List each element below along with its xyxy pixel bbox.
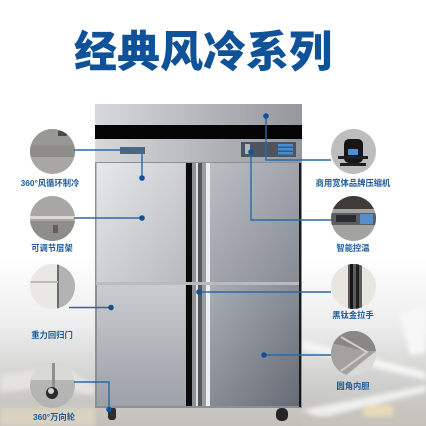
circle: rounded inner liner <box>331 331 376 376</box>
dot: handle <box>196 289 202 295</box>
dot: compressor <box>263 113 269 119</box>
right upper door <box>210 163 299 282</box>
leader: liner <box>264 354 331 356</box>
label: adjustable shelf: 可调节层架 <box>31 243 73 253</box>
left lower door <box>97 285 186 406</box>
body frame <box>95 162 302 408</box>
circle: black titanium handle <box>331 264 376 309</box>
label: air circulation: 360°风循环制冷 <box>21 178 79 188</box>
circle: universal caster <box>30 363 75 408</box>
label: rounded inner liner: 圆角内胆 <box>336 381 370 391</box>
leader: caster <box>74 382 109 409</box>
label: universal caster: 360°万向轮 <box>33 412 75 422</box>
dot: temperature control <box>248 149 254 155</box>
left display <box>120 147 145 154</box>
right dark edge <box>299 163 301 407</box>
label: black titanium handle: 黑钛金拉手 <box>332 310 374 320</box>
label: smart temperature control: 智能控温 <box>336 243 370 253</box>
circle: adjustable shelf <box>30 196 75 241</box>
leader: temperature control <box>251 152 331 220</box>
dot: gravity door <box>108 305 114 310</box>
right lower door <box>210 285 299 406</box>
dot: caster <box>106 407 112 412</box>
label: compressor: 商用宽体品牌压缩机 <box>316 178 390 188</box>
leader: air circulation <box>74 150 142 178</box>
left upper door <box>96 163 186 282</box>
circle: gravity return door <box>30 264 75 309</box>
leader: handle <box>199 291 331 293</box>
title: 经典风冷系列 <box>74 18 332 80</box>
dot: air circulation <box>139 175 145 181</box>
leader: gravity door <box>69 306 111 308</box>
door divider <box>96 282 300 285</box>
circle: smart temperature control <box>331 196 376 241</box>
circle: air circulation <box>30 129 75 174</box>
dot: liner <box>261 352 267 358</box>
center handles <box>186 163 210 406</box>
dot: shelf <box>139 215 145 221</box>
leader: shelf <box>74 217 142 219</box>
circle: compressor <box>331 129 376 174</box>
label: gravity return door: 重力回归门 <box>31 330 73 340</box>
casters <box>108 407 288 421</box>
leader: compressor <box>266 116 331 160</box>
right display panel <box>241 142 296 157</box>
cabinet top and control band <box>95 104 302 162</box>
